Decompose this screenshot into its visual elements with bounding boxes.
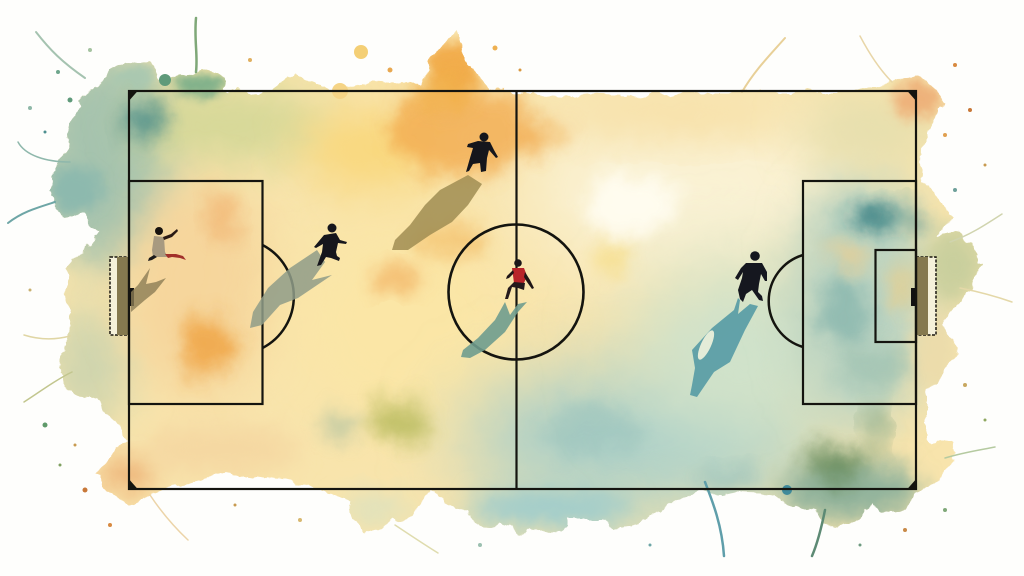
figure (735, 251, 767, 302)
player: top center (392, 132, 498, 250)
pitch markings (129, 91, 916, 489)
goal: right (911, 257, 936, 335)
figure (466, 132, 498, 172)
player: right side (690, 251, 767, 397)
shadow (461, 302, 527, 358)
shadow (392, 175, 482, 250)
figure (505, 259, 534, 299)
shadow (250, 250, 332, 328)
player: left of center (250, 224, 347, 328)
figure (314, 224, 347, 266)
shadow (690, 298, 758, 397)
figure (148, 227, 186, 261)
player: left penalty area (131, 227, 186, 312)
shadow (131, 268, 166, 312)
player: center circle in red (461, 259, 534, 358)
goal: left (110, 257, 134, 335)
